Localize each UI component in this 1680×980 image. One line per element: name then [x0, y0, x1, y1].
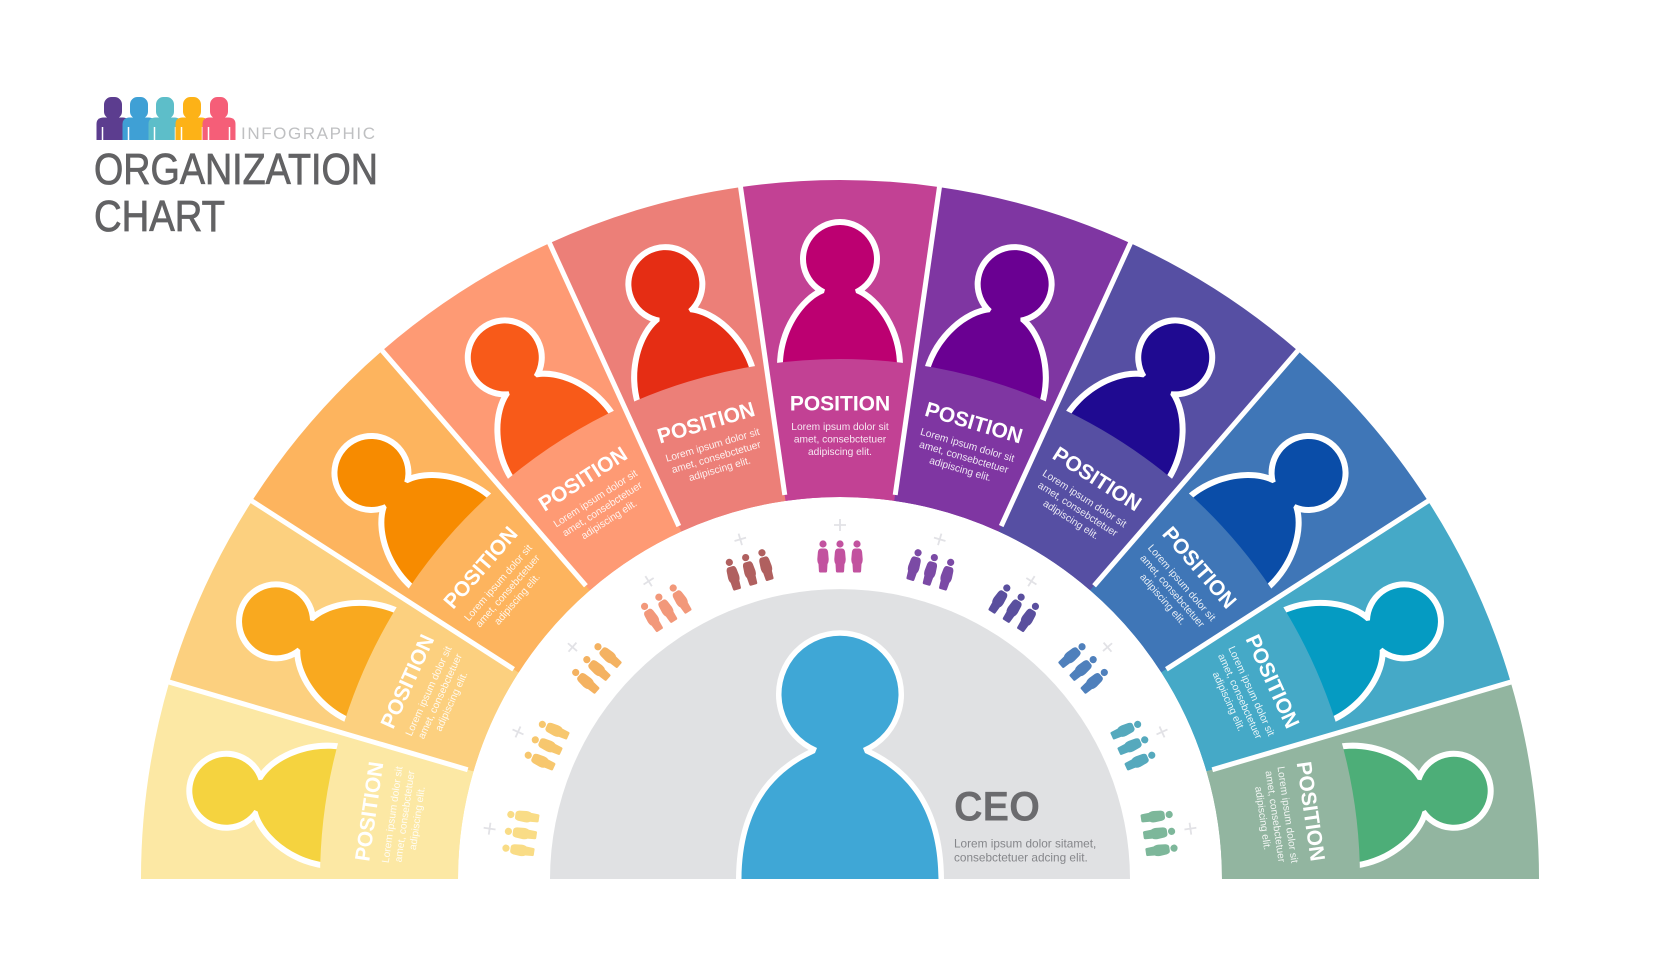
segment 6: magenta position: adipiscing elit. [808, 447, 872, 458]
segment 11: green position: amet, consebctetuer [1263, 770, 1287, 864]
infographic label: INFOGRAPHIC [241, 124, 375, 143]
segment 11: green position: POSITION [1292, 760, 1329, 863]
team icon 7 [905, 527, 963, 591]
segment 10: teal position: POSITION [1241, 631, 1303, 732]
segment 5: red position: amet, consebctetuer [671, 439, 763, 476]
segment 10: teal position: Lorem ipsum dolor sit [1225, 645, 1276, 738]
segment 6: magenta position: amet, consebctetuer [794, 434, 887, 446]
logo: five people icon [96, 97, 236, 140]
segment 1: yellow position [134, 681, 480, 924]
heading line 2: CHART [94, 192, 225, 241]
ceo description: consebctetuer adcing elit. [954, 850, 1088, 864]
segment 3: orange position: POSITION [439, 522, 523, 613]
segment 5: red position: adipiscing elit. [688, 455, 752, 484]
ceo description: Lorem ipsum dolor sitamet, [954, 836, 1096, 850]
segment 3: orange position: adipiscing elit. [493, 572, 543, 627]
segment 1: yellow position: Lorem ipsum dolor sit [381, 766, 405, 864]
ceo panel background [550, 589, 1130, 879]
segment 7: purple position: POSITION [922, 398, 1025, 448]
segment 10: teal position: adipiscing elit. [1210, 670, 1246, 733]
segment 3: orange position: Lorem ipsum dolor sit [463, 543, 535, 624]
team icon 4 [626, 564, 693, 633]
segment 8: indigo position: adipiscing elit. [1041, 498, 1100, 542]
segment 4: coral position: Lorem ipsum dolor sit [552, 468, 640, 530]
team icon 6 [817, 519, 863, 572]
segment 9: blue position: POSITION [1157, 522, 1241, 613]
team icon 9 [1057, 626, 1127, 695]
segment 2: light orange position: POSITION [377, 631, 439, 732]
segment 3: orange position [247, 346, 619, 707]
segment 8: indigo position [961, 237, 1302, 615]
segment 4: coral position: POSITION [535, 443, 632, 516]
segment 11: green position: Lorem ipsum dolor sit [1275, 766, 1299, 864]
segment 2: light orange position: Lorem ipsum dolor sit [404, 645, 455, 738]
segment 10: teal position: amet, consebctetuer [1215, 652, 1264, 741]
segment 5: red position: Lorem ipsum dolor sit [665, 427, 761, 465]
segment 5: red position [548, 180, 829, 544]
segment 4: coral position: amet, consebctetuer [561, 480, 645, 539]
segment 7: purple position [851, 180, 1132, 544]
segment 8: indigo position: amet, consebctetuer [1036, 480, 1120, 540]
segment 2: light orange position: adipiscing elit. [434, 670, 470, 733]
segment 6: magenta position: POSITION [790, 392, 890, 416]
segment 1: yellow position: adipiscing elit. [408, 786, 428, 851]
segment 9: blue position: Lorem ipsum dolor sit [1145, 543, 1217, 624]
segment 1: yellow position: POSITION [351, 760, 388, 863]
segment 4: coral position: adipiscing elit. [580, 498, 639, 542]
team icon 5 [717, 527, 775, 591]
ceo person icon [742, 636, 938, 879]
segment 4: coral position [378, 237, 719, 615]
segment 7: purple position: adipiscing elit. [928, 455, 992, 484]
segment 10: teal position [1143, 498, 1517, 812]
team icon 8 [987, 564, 1054, 633]
title block [94, 97, 378, 241]
segment 2: light orange position: amet, consebctetuer [417, 652, 465, 741]
team icon 3 [553, 626, 623, 695]
segment 2: light orange position [163, 498, 537, 812]
segment 11: green position [1200, 681, 1546, 924]
segment 7: purple position: amet, consebctetuer [918, 439, 1010, 476]
ceo heading: CEO [954, 782, 1040, 830]
segment 7: purple position: Lorem ipsum dolor sit [919, 427, 1016, 465]
segment 9: blue position: amet, consebctetuer [1137, 553, 1207, 630]
segment 9: blue position: adipiscing elit. [1137, 572, 1187, 627]
team icon 2 [503, 709, 571, 772]
segment 11: green position: adipiscing elit. [1252, 786, 1272, 851]
segment 8: indigo position: Lorem ipsum dolor sit [1040, 468, 1128, 530]
team icon 10 [1109, 709, 1177, 772]
segment 9: blue position [1061, 346, 1433, 707]
segment 6: magenta position [740, 180, 940, 501]
heading line 1: ORGANIZATION [94, 145, 378, 194]
segment 6: magenta position: Lorem ipsum dolor sit [791, 422, 889, 433]
segment 8: indigo position: POSITION [1048, 443, 1145, 516]
ring of small team icons [480, 519, 1200, 858]
team icon 11 [1140, 805, 1200, 858]
team icon 1 [480, 805, 540, 858]
segment 3: orange position: amet, consebctetuer [474, 553, 543, 630]
semicircle chart [134, 178, 1546, 924]
ceo description [954, 836, 1096, 864]
segment 5: red position: POSITION [655, 398, 758, 448]
segment 1: yellow position: amet, consebctetuer [393, 769, 418, 863]
